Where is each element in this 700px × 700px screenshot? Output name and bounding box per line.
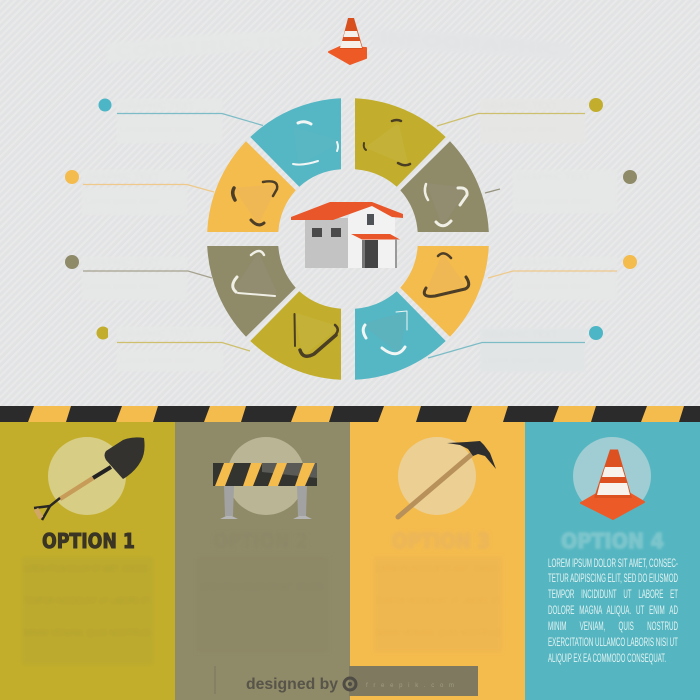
- icon: barricade: [213, 463, 317, 519]
- title right half: INFOGRAPHIC: [380, 30, 563, 58]
- callout: right grey: [485, 170, 637, 213]
- wheel of segments: [207, 98, 489, 380]
- callout: left yellow: [65, 170, 214, 215]
- title right half: [373, 30, 570, 60]
- callout: right yellow: [488, 255, 637, 300]
- text block: option 1 body: [22, 557, 153, 665]
- callout: left grey: Lorem ipsum dolor: [85, 281, 160, 291]
- text block: option 1 body: MINIM VENIAM, QUIS NOSTRUD: [24, 628, 150, 639]
- callout: top left teal: Lorem ipsum dolor: [120, 124, 195, 134]
- callout: bottom right teal: [428, 326, 603, 372]
- hazard stripe band: [0, 406, 700, 422]
- title left half: [107, 30, 320, 62]
- callout: bottom right teal: Lorem ipsum dolor: [483, 355, 558, 365]
- icon circle: [48, 437, 126, 515]
- callout: bottom right teal: GRAPHIC TEXT: [483, 330, 557, 341]
- title left half: CONSTRUCTION: [114, 32, 313, 61]
- heading: option 2: OPTION 2: [213, 529, 308, 553]
- segment: right upper grey: [400, 141, 489, 232]
- callout: bottom left olive: Lorem ipsum dolor: [120, 355, 195, 365]
- icon: yellow right lower triangle: [424, 253, 469, 296]
- background: [0, 0, 700, 406]
- text block: option 2 body: LOREM IPSUM DOLOR SIT AMET, CONSEC-: [199, 582, 325, 593]
- footer credit: [214, 666, 338, 694]
- callouts: [65, 98, 637, 372]
- text block: option 2 body: [197, 557, 328, 652]
- icon: traffic cone: [581, 450, 644, 519]
- heading: option 3: OPTION 3: [392, 529, 490, 553]
- footer site name: freepik.com: [366, 683, 454, 689]
- segment icons: [233, 120, 469, 356]
- segment: bottom right teal: [355, 291, 446, 380]
- segment: right lower yellow: [400, 246, 489, 337]
- icon circle: [227, 437, 305, 515]
- heading: option 1: OPTION 1: [42, 529, 135, 553]
- segment: top left teal: [250, 98, 341, 187]
- callout: right yellow: GRAPHIC TEXT: [516, 258, 590, 269]
- icon: pickaxe: [398, 441, 496, 517]
- icon: title traffic cone: [329, 18, 366, 64]
- icon: teal top left triangle: [293, 122, 338, 165]
- text block: option 1 body: TEMPOR INCIDIDUNT UT LABORE ET: [24, 596, 150, 607]
- icon: house: [291, 202, 403, 268]
- icon: shovel: [34, 437, 145, 520]
- footer logo patch: [344, 666, 478, 696]
- panel: option 2: [175, 422, 350, 700]
- icon circle: [398, 437, 476, 515]
- callout: bottom left olive: [96, 326, 250, 352]
- heading: option 4: OPTION 4: [561, 529, 664, 553]
- text block: option 4 body: [548, 556, 678, 665]
- icon: logo: [344, 678, 356, 690]
- callout: top left teal: [98, 98, 263, 143]
- callout: right grey: GRAPHIC TEXT: [516, 172, 590, 183]
- text block: option 3 body: LOREM IPSUM DOLOR SIT AMET, CONSEC-: [376, 564, 500, 575]
- title: [107, 18, 570, 64]
- text block: option 3 body: MINIM VENIAM, QUIS NOSTRUD: [376, 628, 500, 639]
- callout: top right olive: GRAPHIC TEXT: [483, 101, 557, 112]
- callout: left yellow: Lorem ipsum dolor: [85, 196, 160, 206]
- icon: olive bottom left triangle: [294, 314, 338, 356]
- callout: top right olive: [437, 98, 603, 143]
- callout: left yellow: GRAPHIC TEXT: [85, 172, 159, 183]
- icon: grey right upper triangle: [425, 184, 467, 226]
- callout: left grey: GRAPHIC TEXT: [85, 258, 159, 269]
- icon: olive top right triangle: [364, 120, 410, 165]
- panel: option 1: [0, 422, 175, 700]
- footer credit: designed by: [246, 676, 338, 693]
- callout: right grey: Lorem ipsum dolor: [516, 196, 591, 206]
- segment: top right olive: [355, 98, 446, 187]
- panel: option 3: [350, 422, 525, 700]
- text block: option 3 body: [374, 557, 502, 652]
- callout: left grey: [65, 255, 212, 300]
- callout: top right olive: Lorem ipsum dolor: [483, 124, 558, 134]
- icon circle: [573, 437, 651, 515]
- icon: teal bottom right triangle: [363, 311, 407, 354]
- panel: option 4: [525, 422, 700, 700]
- callout: right yellow: Lorem ipsum dolor: [516, 281, 591, 291]
- segment: left upper yellow: [207, 141, 296, 232]
- callout: top left teal: GRAPHIC TEXT: [120, 101, 194, 112]
- callout: bottom left olive: GRAPHIC TEXT: [120, 329, 194, 340]
- segment: bottom left olive: [250, 291, 341, 380]
- text block: option 1 body: LOREM IPSUM DOLOR SIT AMET, CONSEC-: [24, 564, 150, 575]
- icon: yellow left upper triangle: [233, 181, 277, 225]
- segment: left lower grey: [207, 246, 296, 337]
- icon: grey left lower triangle: [233, 251, 275, 296]
- text block: option 3 body: TEMPOR INCIDIDUNT UT LABORE ET: [376, 596, 500, 607]
